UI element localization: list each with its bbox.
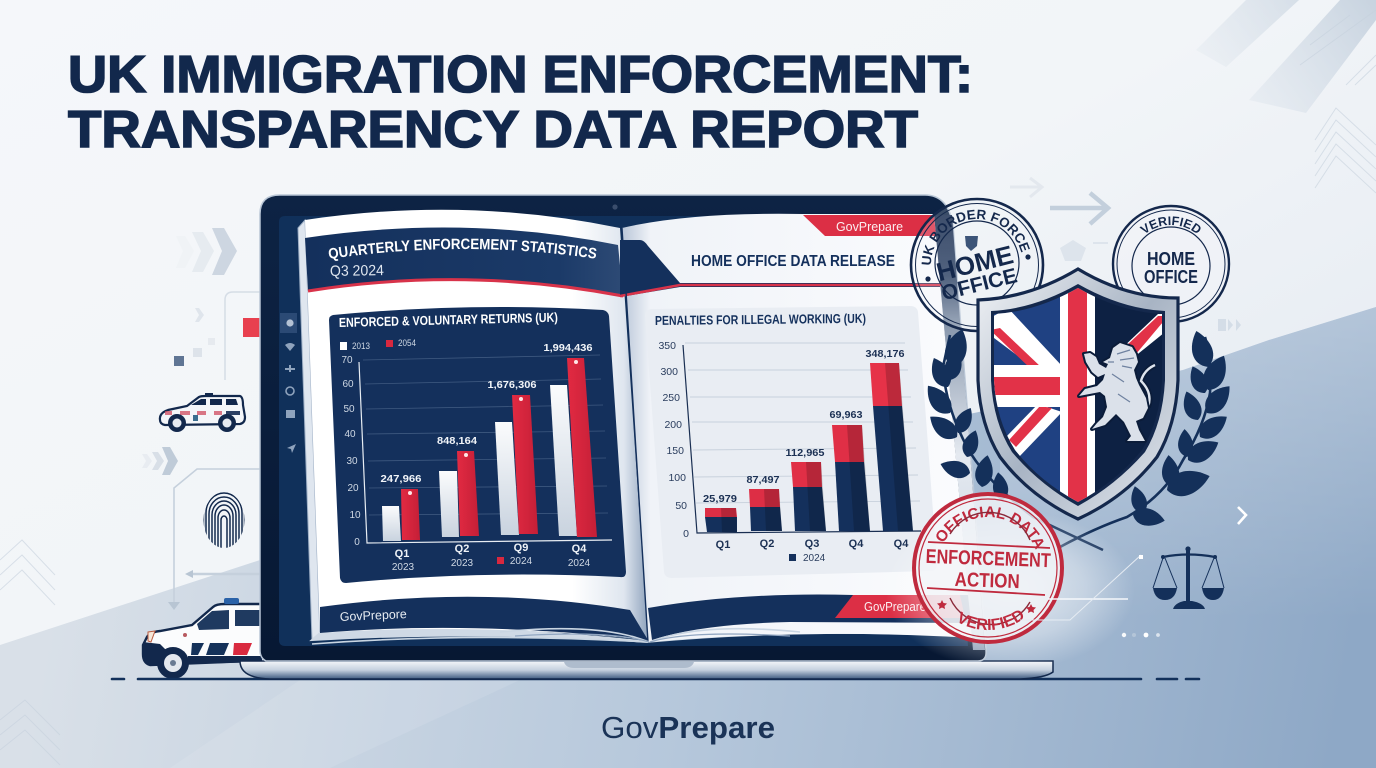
value labels (380, 342, 593, 485)
axes (359, 362, 612, 543)
title (68, 46, 973, 159)
y axis labels (341, 355, 361, 548)
y axis labels: 50 (675, 500, 687, 512)
right page footer (648, 595, 971, 640)
stamp: official data enforcement action verified (912, 492, 1064, 644)
value labels: 87,497 (746, 474, 780, 486)
stamp: UK Border Force Home Office: UK BORDER FORCE (922, 210, 1030, 265)
title: TRANSPARENCY DATA REPORT (68, 101, 918, 159)
gridlines (685, 343, 920, 503)
axes (683, 345, 921, 533)
x axis labels: Q2 (760, 538, 774, 550)
y axis labels: 250 (662, 392, 680, 404)
x axis labels: Q9 (514, 542, 528, 554)
x axis labels: Q4 (572, 543, 587, 555)
lion (1079, 343, 1155, 441)
left page (305, 210, 648, 640)
value labels: 1,676,306 (488, 379, 537, 391)
value labels: 348,176 (866, 348, 905, 360)
laptop notch (564, 662, 694, 668)
y axis labels: 40 (344, 429, 356, 440)
y axis labels: 10 (349, 510, 361, 521)
x axis labels: 2023 (451, 558, 474, 569)
right laurel branch (1060, 328, 1236, 547)
left page header (305, 228, 623, 298)
y axis labels: 200 (664, 419, 682, 431)
x axis labels: 2024 (510, 556, 533, 567)
chart: penalties for illegal working (645, 306, 937, 578)
header title: QUARTERLY ENFORCEMENT STATISTICS (328, 238, 596, 261)
right page footer: GovPrepare (864, 600, 926, 614)
icon: fingerprint (204, 492, 244, 548)
y axis labels: 60 (342, 379, 354, 390)
camera (612, 204, 618, 210)
stamp: Verified Home Office: VERIFIED (1140, 216, 1200, 233)
x axis labels: Q4 (894, 538, 909, 550)
gridlines (363, 355, 608, 515)
laptop (240, 195, 1053, 679)
connector lines (168, 469, 260, 610)
soft glow behind action stamp (885, 510, 1135, 670)
icon: scales of justice (1153, 546, 1224, 609)
x axis labels: Q1 (395, 548, 409, 560)
value labels: 69,963 (830, 409, 863, 421)
value labels: 112,965 (786, 447, 825, 459)
stamp: official data enforcement action verified: ENFORCEMENT (925, 546, 1051, 572)
left page footer (320, 597, 648, 640)
x axis labels: 2024 (568, 558, 591, 569)
x axis labels: Q4 (849, 538, 864, 550)
y axis labels: 0 (683, 528, 689, 540)
page stack edges (298, 220, 970, 644)
bars (382, 358, 597, 541)
screen inner panel (279, 216, 968, 646)
top corner tab (803, 215, 936, 236)
right decorative arrows and marks (1010, 178, 1246, 637)
value labels: 25,979 (703, 493, 737, 505)
y axis labels: 20 (347, 483, 359, 494)
right page (620, 214, 972, 642)
header subtitle: Q3 2024 (330, 262, 384, 280)
y axis labels: 100 (668, 472, 686, 484)
x axis labels: Q1 (716, 539, 730, 551)
y axis labels: 50 (343, 404, 355, 415)
header title: HOME OFFICE DATA RELEASE (691, 253, 895, 270)
x axis labels (716, 538, 909, 551)
x axis labels: 2023 (392, 562, 415, 573)
stamp: UK Border Force Home Office (910, 198, 1044, 332)
x axis labels: Q2 (455, 543, 469, 555)
gutter (500, 228, 800, 642)
x axis labels (392, 542, 591, 573)
stamp: Verified Home Office: HOME (1147, 249, 1195, 269)
stamp: official data enforcement action verified: ACTION (954, 569, 1020, 593)
stamp: UK Border Force Home Office: HOME (933, 239, 1016, 287)
y axis labels: 70 (341, 355, 353, 366)
legend (340, 338, 416, 351)
icon: small police car (160, 393, 245, 432)
legend: 2013 (352, 341, 370, 351)
flag field (990, 285, 1170, 505)
stamp: Verified Home Office (1112, 204, 1230, 322)
y axis labels (658, 340, 689, 540)
y axis labels: 350 (658, 340, 676, 352)
value labels: 1,994,436 (544, 342, 593, 354)
title: UK IMMIGRATION ENFORCEMENT: (68, 46, 973, 104)
y axis labels: 30 (346, 456, 358, 467)
left decorative chevrons and squares (142, 228, 260, 475)
bars (705, 363, 913, 532)
sidebar icons (280, 313, 297, 453)
y axis labels: 150 (666, 445, 684, 457)
y axis labels: 0 (354, 537, 360, 548)
icon: large police car (143, 598, 275, 679)
shield with union flag and lion (978, 269, 1178, 519)
stamp: Verified Home Office: OFFICE (1144, 267, 1198, 287)
chart title: PENALTIES FOR ILLEGAL WORKING (UK) (655, 311, 866, 328)
baseline with dashes (112, 678, 1199, 680)
open report book (298, 210, 972, 645)
value labels: 848,164 (437, 435, 477, 447)
crest (965, 236, 978, 251)
chart title: ENFORCED & VOLUNTARY RETURNS (UK) (339, 310, 558, 330)
stamp: official data enforcement action verified: VERIFIED (960, 610, 1024, 630)
header wedge and rule (620, 240, 940, 297)
chart: enforced and voluntary returns (329, 307, 626, 583)
top corner tab: GovPrepare (836, 219, 903, 234)
left page footer: GovPrepore (340, 607, 407, 624)
legend (789, 553, 826, 564)
value labels (703, 348, 905, 505)
legend: 2024 (803, 553, 826, 564)
legend: 2054 (398, 338, 416, 348)
value labels: 247,966 (380, 473, 422, 485)
left laurel branch (920, 326, 1103, 550)
x axis labels: Q3 (805, 538, 819, 550)
laptop screen bezel (260, 195, 986, 661)
stamp: UK Border Force Home Office: OFFICE (939, 264, 1020, 305)
laptop base (240, 661, 1053, 679)
shield frame (978, 269, 1178, 519)
stamp: official data enforcement action verified: OFFICIAL DATA (936, 506, 1044, 550)
bezel right edge (934, 215, 985, 650)
footer brand logo: GovPrepare (601, 710, 775, 745)
y axis labels: 300 (660, 366, 678, 378)
